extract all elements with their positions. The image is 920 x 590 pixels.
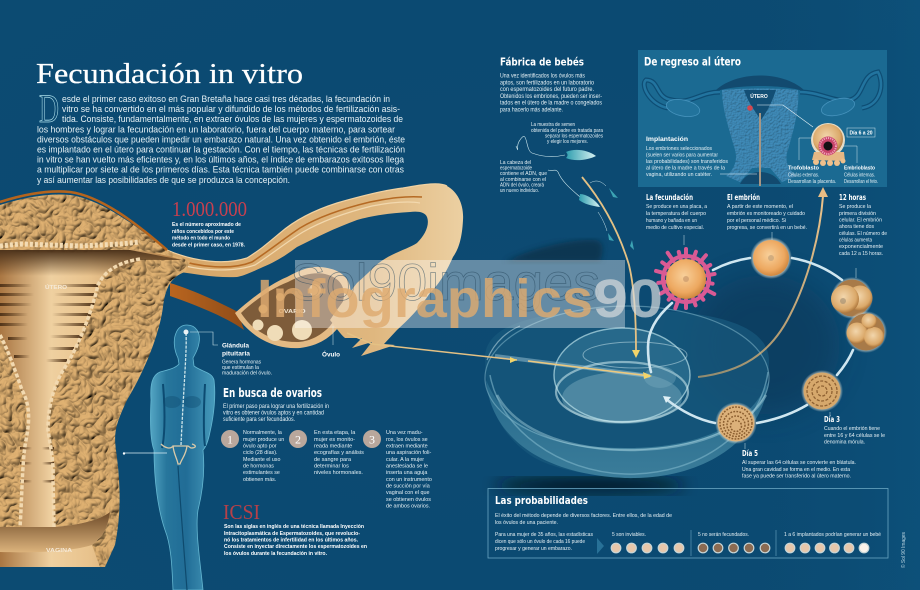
text: 12 horas: celular. El embrión (839, 218, 882, 224)
text: día 5: Al superar las 64 células se convierte en blástula. (742, 460, 856, 466)
implantación text: las probabilidades) son transferidos (646, 159, 728, 165)
step 3: vaginal con el que (386, 490, 429, 496)
step 3: anestesiada se le (386, 464, 428, 470)
intro text: diversos obstáculos que pueden impedir un embarazo natural. Una vez obtenido el embrión, éste (37, 133, 405, 144)
group: implantados: 1 a 6 implantados podrían generar un bebé (784, 532, 881, 538)
watermark: 90 (593, 269, 663, 329)
text: el embrión: por el personal médico. Si (727, 218, 786, 224)
text: el embrión: El embrión (727, 193, 760, 202)
intro text: a multiplicar por siete al de los primeros días. Esta técnica también puede combinarse con otras (37, 164, 404, 175)
text: 12 horas: ahora tiene dos (839, 224, 874, 230)
text: la fecundación: La fecundación (646, 193, 693, 202)
section: ICSI: Son las siglas en inglés de una técnica llamada Inyección (224, 524, 364, 530)
step 2: ecografías y análisis (314, 450, 364, 456)
text: 12 horas: células aumenta (839, 238, 873, 244)
implantación text: Los embriones seleccionados (646, 146, 712, 152)
stage: día 3 morula (801, 370, 843, 412)
body text: Obtenidos los embriones, pueden ser inser- (500, 94, 602, 100)
stat: 1.000.000: método en todo el mundo (172, 236, 230, 242)
step 3 (363, 430, 432, 510)
description: progresar y generar un embarazo. (495, 546, 572, 552)
section: ICSI: Consiste en inyectar directamente los espermatozoides en (224, 544, 367, 550)
description (495, 513, 672, 552)
text: 12 horas: exponencialmente (839, 244, 883, 250)
implantación text: Implantación (646, 136, 688, 143)
body text: aptos, son fertilizados en un laboratorio (500, 80, 595, 86)
label: glándula pituitaria: pituitaria (222, 350, 250, 358)
endometrium edge (0, 242, 140, 246)
text: día 3: Día 3 (824, 415, 840, 424)
label: glándula pituitaria: Glándula (222, 342, 249, 350)
intro text: vitro se ha convertido en el más popular y difundido de los métodos de fertilización asis- (62, 103, 400, 114)
step 1: ciclo (28 días). (243, 450, 277, 456)
reproductive organs diagram (644, 72, 881, 186)
text: 12 horas: células. El número de (839, 231, 887, 237)
text: 12 horas: Se produce la (839, 204, 872, 210)
label: glándula pituitaria: que estimulan la (222, 365, 259, 371)
embrioblasto: Células internas. (844, 172, 875, 178)
step 3: de succión por vía (386, 484, 430, 490)
group: no fecundados: 5 no serán fecundados. (698, 532, 749, 538)
text: la fecundación (646, 193, 708, 231)
section: ICSI: Intracitoplasmática de Espermatozoides, que revolucio- (224, 531, 360, 537)
semen note: La muestra de semen (531, 122, 575, 128)
intro (223, 404, 329, 423)
stat: 1.000.000 (172, 197, 247, 248)
watermark: Sol90images (290, 254, 600, 312)
trofoblasto: Trofoblasto (788, 166, 820, 172)
step 2: mujer es monito- (314, 437, 355, 443)
blastocyst leaders (799, 138, 857, 163)
body text (500, 74, 602, 114)
step 3: con un instrumento (386, 477, 432, 483)
stage: four cells (845, 311, 887, 353)
semen note (531, 122, 603, 145)
body text: Una vez identificados los óvulos más (500, 74, 585, 80)
uterine wall tissue (0, 194, 190, 567)
DNA note: espermatozoide (500, 166, 532, 172)
step 2: 2 (295, 432, 301, 446)
uterine cavity (0, 250, 182, 567)
label: óvulo: Óvulo (322, 350, 340, 358)
description: dicen que sólo un óvulo de cada 16 puede (495, 539, 585, 545)
semen note: separar los espermatozoides (545, 134, 603, 140)
step 2: determinar los (314, 464, 349, 470)
step 3: se obtienen óvulos (386, 497, 431, 503)
step 3: inserta una aguja (386, 470, 427, 476)
DNA note: La cabeza del (500, 160, 531, 166)
text: el embrión: progresa, se convertirá en un bebé. (727, 225, 807, 231)
intro text: y así aumentar las posibilidades de que se produzca la concepción. (37, 174, 290, 185)
text: día 5: Una gran cavidad se forma en el medio. En esta (742, 467, 851, 473)
step 3: ros, los óvulos se (386, 437, 428, 443)
stat: 1.000.000: niños concebidos por este (172, 229, 234, 235)
section: ICSI: nó los tratamientos de infertilidad en los últimos años. (224, 538, 358, 544)
text: el embrión: embrión es monitoreado y cuidado (727, 211, 805, 217)
embrioblasto (844, 166, 878, 185)
semen note: y elegir los mejores. (547, 139, 588, 145)
text: día 5: fase ya puede ser transferido al útero materno. (742, 474, 851, 480)
implantación text: al útero de la madre a través de la (646, 166, 726, 172)
text: día 3: denomina mórula. (824, 440, 865, 446)
DNA note: al combinarse con el (500, 177, 546, 183)
spinal signal path (181, 333, 186, 445)
step 2: En esta etapa, la (314, 430, 356, 436)
endometrium fold bands (0, 284, 98, 482)
drop cap: D (39, 86, 59, 131)
implantación text: (suelen ser varios para aumentar (646, 152, 718, 158)
credit: © Sol 90 Images (900, 532, 907, 568)
group: inviables (611, 532, 684, 553)
ring arrowhead (663, 396, 671, 403)
label: óvulo (322, 326, 340, 358)
body text: con espermatozoides del futuro padre. (500, 87, 594, 93)
description: El éxito del método depende de diversos factores. Entre ellos, de la edad de (495, 513, 672, 519)
ovary follicles (252, 284, 321, 341)
stat: 1.000.000: 1.000.000 (172, 197, 247, 221)
intro: El primer paso para lograr una fertilización in (223, 404, 329, 410)
label: útero: ÚTERO (45, 284, 68, 291)
label: glándula pituitaria: maduración del óvulo. (222, 370, 272, 376)
text: día 5 (742, 449, 856, 480)
body text: tados en el útero de la madre o congelados (500, 100, 602, 106)
group: implantados (784, 532, 881, 553)
stat: 1.000.000: desde el primer caso, en 1978. (172, 242, 245, 248)
intro text: tida. Consiste, fundamentalmente, en extraer óvulos de las mujeres y espermatozoides de (62, 113, 403, 124)
step 1 (221, 430, 284, 483)
label: glándula pituitaria: Genera hormonas (222, 360, 261, 366)
implantación text: vagina, utilizando un catéter. (646, 172, 712, 178)
stage: día 5 blastocyst (715, 402, 757, 444)
intro text: es implantado en el útero para continuar la gestación. Con el tiempo, las técnicas de fertilización (37, 144, 405, 154)
section: fábrica de bebés (500, 56, 634, 250)
group: no fecundados (698, 532, 770, 553)
watermark: Infographics (257, 269, 593, 329)
leader to uterus (124, 452, 167, 454)
label: vagina: VAGINA (46, 548, 72, 554)
leader dot (123, 452, 125, 455)
uterine rim (0, 191, 167, 250)
description: Para una mujer de 35 años, las estadísticas (495, 532, 593, 538)
title: Fecundación in vitro (36, 58, 303, 90)
step 3: 3 (369, 432, 375, 446)
text: el embrión: A partir de este momento, el (727, 204, 793, 210)
step 1: óvulo apto por (243, 444, 277, 450)
day tag: Día 6 a 20 (849, 130, 873, 136)
útero label: ÚTERO (750, 93, 768, 100)
heading: Fábrica de bebés (500, 56, 584, 68)
step 1: Mediante el uso (243, 457, 280, 463)
arrow: embryo transfer to uterus (698, 187, 828, 377)
pituitary glow (184, 330, 188, 334)
arrow: sperm to dish (582, 177, 640, 358)
intro text (37, 86, 405, 185)
step 3: una aspiración foli- (386, 450, 431, 456)
step 3: Una vez madu- (386, 430, 423, 436)
trofoblasto: Desarrollan la placenta. (788, 179, 836, 185)
intro text: los hombres y lograr la fecundación en un laboratorio, fuera del cuerpo materno, para sortear (37, 123, 395, 134)
text: la fecundación: Se produce en una placa, a (646, 204, 708, 210)
arrow: egg to dish (347, 333, 652, 379)
label: glándula pituitaria (190, 332, 272, 376)
panel: de regreso al útero (638, 50, 887, 187)
watermark (257, 254, 663, 329)
panel: las probabilidades (488, 488, 888, 558)
stage: fecundación cell (654, 247, 717, 311)
section: ICSI: los óvulos durante la fecundación in vitro. (224, 551, 327, 557)
text: 12 horas: primera división (839, 211, 876, 217)
text: día 3 (824, 415, 885, 446)
uterus cross-section (0, 184, 463, 567)
DNA note: ADN del óvulo, creará (500, 182, 544, 188)
stage: embrión cell (750, 237, 792, 279)
text: día 3: entre 16 y 64 células se le (824, 433, 885, 439)
step 1: obtienen más. (243, 477, 276, 483)
blastocyst (811, 123, 846, 166)
catheter (759, 113, 761, 186)
fallopian tube (165, 184, 463, 356)
small reproductive organs (161, 444, 195, 464)
text: la fecundación: humano y bañada en un (646, 218, 697, 224)
implantación text (646, 136, 757, 178)
step 2: niveles hormonales. (314, 470, 363, 476)
trofoblasto (788, 166, 836, 185)
step 1: mujer produce un (243, 437, 284, 443)
stage: two cells (831, 277, 873, 319)
sperm cells (516, 136, 634, 250)
text: el embrión (727, 193, 807, 231)
intro: vitro es obtener óvulos aptos y en cantidad (223, 410, 324, 416)
chevron (597, 538, 604, 554)
step 2 (289, 430, 364, 476)
description: los óvulos de una paciente. (495, 520, 558, 526)
text: la fecundación: medio de cultivo especial. (646, 225, 704, 231)
label: ovario: OVARIO (278, 309, 306, 315)
intro: suficiente para ser fecundados. (223, 417, 295, 423)
human body figure (123, 325, 215, 590)
body text: para hacerlo más adelante. (500, 108, 563, 114)
semen note: obtenida del padre es tratada para (531, 128, 603, 134)
vaginal fornix (0, 512, 110, 552)
embrioblasto: Embrioblasto (844, 166, 876, 172)
day tag (847, 128, 875, 137)
ovary (235, 267, 351, 348)
step 3: extraen mediante (386, 444, 428, 450)
heading: Las probabilidades (495, 495, 588, 507)
intro text: in vitro se han vuelto más eficientes y, en los últimos años, el índice de embarazos exitosos llega (37, 154, 405, 165)
DNA note: contiene el ADN, que (500, 171, 547, 177)
step 2: reada mediante (314, 444, 352, 450)
step 1: estimulantes se (243, 470, 280, 476)
fallopian ligament (170, 283, 244, 330)
text: 12 horas: 12 horas (839, 193, 866, 202)
step 3: cular. A la mujer (386, 457, 424, 463)
step 1: 1 (227, 432, 233, 446)
pointer to blastocyst (757, 105, 813, 127)
stat: 1.000.000: Es el número aproximado de (172, 222, 241, 228)
group: inviables: 5 son inviables. (612, 532, 646, 538)
step 1: Normalmente, la (243, 430, 282, 436)
cycle ring (648, 258, 853, 423)
embryo development cycle (648, 232, 887, 449)
text: la fecundación: la temperatura del cuerpo (646, 211, 706, 217)
step 1: de hormonas (243, 464, 274, 470)
step 3: de ambos ovarios. (386, 504, 430, 510)
heading: En busca de ovarios (223, 386, 322, 400)
petri dish (485, 240, 769, 494)
heading: De regreso al útero (644, 55, 741, 69)
section: ICSI (223, 500, 367, 557)
embryo in catheter (747, 105, 753, 111)
intro text: esde el primer caso exitoso en Gran Bretaña hace casi tres décadas, la fecundación in (62, 93, 390, 104)
text: 12 horas (839, 193, 887, 257)
connectors (684, 232, 856, 449)
section: ICSI: ICSI (223, 500, 260, 524)
text: día 5: Día 5 (742, 449, 758, 458)
text: día 3: Cuando el embrión tiene (824, 426, 880, 432)
DNA note: un nuevo individuo. (500, 188, 539, 194)
text: 12 horas: cada 12 a 15 horas. (839, 251, 883, 257)
step 2: de sangre para (314, 457, 352, 463)
embrioblasto: Desarrollan el feto. (844, 179, 878, 185)
trofoblasto: Células externas. (788, 172, 819, 178)
DNA note (500, 160, 547, 194)
section: en busca de ovarios (221, 386, 432, 510)
